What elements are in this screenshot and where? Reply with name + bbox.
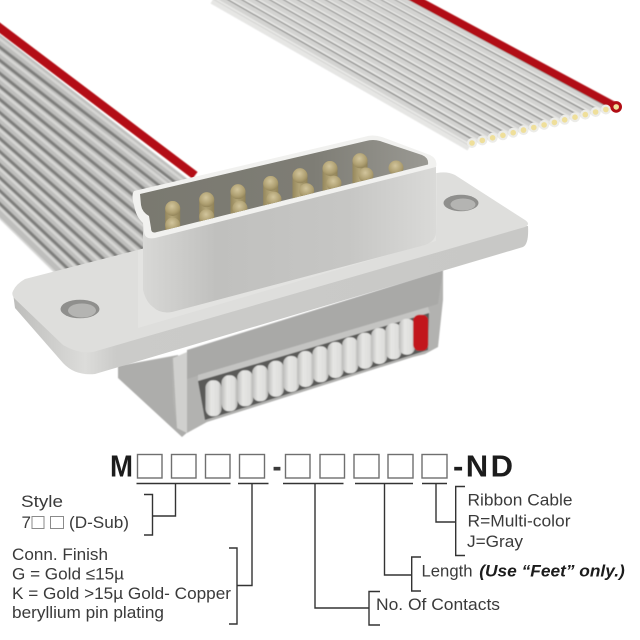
housing front face xyxy=(172,270,443,433)
plate top face xyxy=(12,172,528,352)
label: style: (D-Sub) xyxy=(69,513,129,532)
plate edge xyxy=(13,226,528,374)
connector rear housing with ribbon terminations xyxy=(118,270,443,437)
right mounting hole xyxy=(444,195,478,211)
left ribbon red edge wire xyxy=(0,24,195,175)
terminated wires xyxy=(206,319,415,416)
label: ribbon cable: R=Multi-color xyxy=(468,512,571,530)
label: ribbon cable: Ribbon Cable xyxy=(468,490,572,510)
housing side face xyxy=(118,355,190,437)
label: connector finish: Conn. Finish xyxy=(12,545,108,564)
shell opening xyxy=(140,140,428,233)
label: style: 7 xyxy=(22,513,31,532)
label: length: (Use “Feet” only.) xyxy=(479,562,625,580)
window xyxy=(198,313,429,420)
label: length: Length xyxy=(422,562,472,580)
part number code xyxy=(110,448,513,484)
wire ends of right ribbon xyxy=(467,101,622,148)
ledge xyxy=(198,307,430,382)
part number code: -ND xyxy=(453,448,513,484)
D-sub shell xyxy=(132,136,436,312)
label: connector finish: K = Gold >15µ Gold- Copper xyxy=(12,584,231,603)
gold pins xyxy=(165,153,404,230)
mounting flange plate xyxy=(12,172,528,374)
shell rim xyxy=(132,136,436,238)
left mounting hole xyxy=(60,300,100,318)
upper band xyxy=(187,270,443,379)
part number code: - xyxy=(272,448,282,484)
label: ribbon cable: J=Gray xyxy=(467,532,523,551)
red edge wire xyxy=(410,0,616,107)
label: number of contacts: No. Of Contacts xyxy=(376,595,500,614)
underlines and bracket leaders xyxy=(136,484,465,625)
label: style: Style xyxy=(21,492,63,511)
label: connector finish: G = Gold ≤15µ xyxy=(12,564,124,584)
label: connector finish: beryllium pin plating xyxy=(12,603,164,622)
label: ribbon cable xyxy=(467,490,572,551)
shell body xyxy=(143,165,436,312)
right ribbon cable xyxy=(212,0,616,147)
label: style xyxy=(21,492,129,532)
left ribbon cable xyxy=(0,36,194,314)
lighter centre xyxy=(138,173,437,328)
part number code: M xyxy=(110,448,133,484)
corner pillar xyxy=(173,352,187,433)
red terminated wire xyxy=(413,315,428,351)
label: connector finish xyxy=(12,545,231,622)
